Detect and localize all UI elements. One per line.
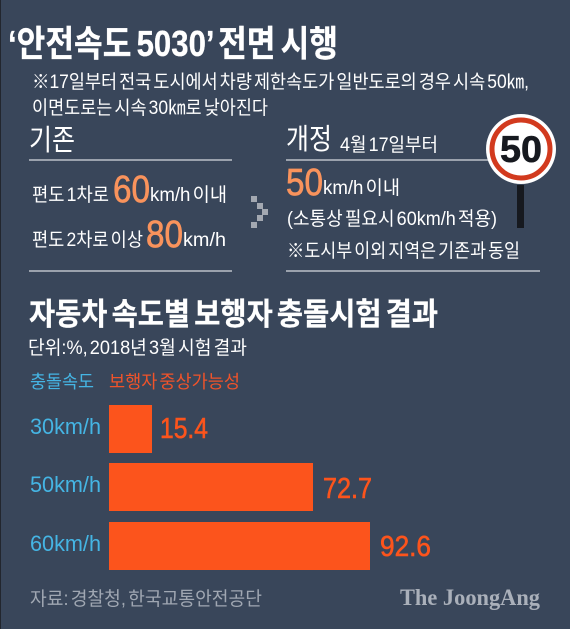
intro text: ※17일부터 전국 도시에서 차량 제한속도가 일반도로의 경우 시속 50㎞, [32, 71, 529, 93]
panel: revised limits [286, 124, 540, 272]
non-urban note: ※도시부 이외 지역은 기존과 동일 [287, 240, 520, 262]
bar: 30km/h [30, 405, 208, 453]
row: one-lane limit [32, 169, 227, 211]
heading: crash test: 자동차 속도별 보행자 충돌시험 결과 [29, 297, 438, 332]
bar chart [30, 405, 431, 570]
intro text [32, 71, 529, 119]
revised limit value: km/h 이내 [323, 177, 400, 199]
row: one-lane limit: km/h 이내 [150, 184, 227, 206]
bar: 60km/h: 60km/h [30, 531, 101, 556]
bar: 30km/h: 15.4 [160, 413, 208, 445]
row: two-lane limit: km/h [183, 230, 226, 251]
effective date: 4월 17일부터 [340, 134, 438, 156]
revised limit value [286, 162, 400, 204]
bar: 50km/h: 72.7 [323, 473, 372, 505]
bar: 50km/h [30, 463, 372, 511]
logo: The JoongAng: The JoongAng [400, 585, 540, 610]
heading: revised: 개정 [286, 124, 332, 156]
revised limit value: 50 [286, 162, 323, 204]
title: ‘안전속도 5030’ 전면 시행 [8, 23, 338, 64]
bar: 50km/h: 50km/h [30, 472, 101, 497]
arrow: pixel chevron [251, 196, 268, 228]
icon: speed limit sign [486, 114, 556, 228]
icon: speed limit sign: 50 [500, 129, 542, 170]
row: two-lane limit: 80 [146, 214, 183, 256]
row: one-lane limit: 60 [113, 169, 150, 211]
legend: 보행자 중상가능성 [109, 372, 240, 392]
source: 자료: 경찰청, 한국교통안전공단 [30, 588, 262, 610]
row: two-lane limit: 편도 2차로 이상 [32, 229, 143, 251]
bar: 60km/h [30, 522, 431, 570]
heading: existing: 기존 [29, 125, 75, 157]
panel: existing limits [29, 125, 232, 272]
bar: 30km/h: 30km/h [30, 414, 101, 439]
legend: 충돌속도 [30, 372, 94, 392]
intro text: 이면도로는 시속 30㎞로 낮아진다 [32, 97, 268, 119]
unit note: 단위:%, 2018년 3월 시험 결과 [28, 337, 247, 359]
exception note: (소통상 필요시 60km/h 적용) [287, 208, 497, 230]
bar: 60km/h: 92.6 [380, 531, 431, 563]
row: two-lane limit [32, 214, 226, 256]
legend [30, 372, 240, 392]
row: one-lane limit: 편도 1차로 [32, 184, 109, 206]
